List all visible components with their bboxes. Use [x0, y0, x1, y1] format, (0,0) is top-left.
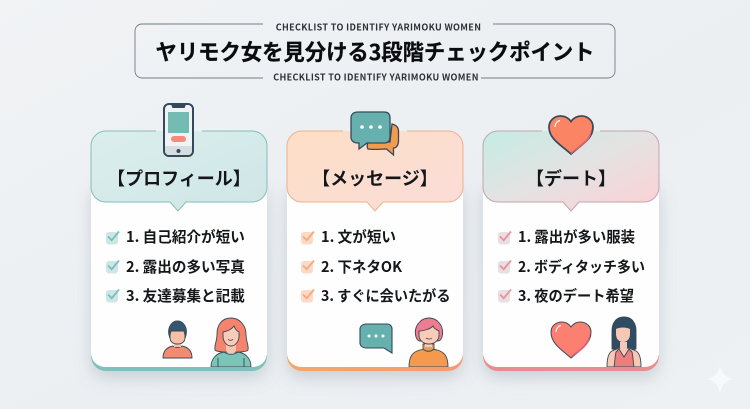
- title subtitle bottom: CHECKLIST TO IDENTIFY YARIMOKU WOMEN: [273, 70, 479, 84]
- checklist: [301, 226, 450, 306]
- item 3: 3. 夜のデート希望: [518, 285, 634, 306]
- item 1: 1. 文が短い: [321, 226, 396, 247]
- card body: [287, 180, 463, 371]
- panel: date: [483, 116, 659, 371]
- icon: chat bubbles: [351, 112, 398, 155]
- icon: woman with dark hair: [607, 317, 641, 367]
- icon: smartphone: [164, 104, 193, 156]
- card body: [91, 180, 267, 371]
- heading: 【デート】: [526, 165, 616, 191]
- checklist: [498, 226, 645, 306]
- checklist: [106, 226, 245, 306]
- header bubble: [483, 131, 659, 211]
- icon: sparkle: [707, 365, 733, 393]
- header bubble: [287, 131, 463, 211]
- panel: message: [287, 112, 463, 371]
- heading: 【プロフィール】: [107, 165, 251, 191]
- item 1: 1. 露出が多い服装: [518, 226, 635, 247]
- icon: man: [163, 321, 192, 358]
- icon: woman: [211, 318, 251, 367]
- item 2: 2. ボディタッチ多い: [518, 256, 645, 277]
- title subtitle top: CHECKLIST TO IDENTIFY YARIMOKU WOMEN: [276, 20, 481, 34]
- main title: ヤリモク女を見分ける3段階チェックポイント: [156, 36, 594, 67]
- item 3: 3. 友達募集と記載: [126, 285, 245, 306]
- title banner: [135, 20, 615, 84]
- item 2: 2. 下ネタOK: [321, 256, 403, 277]
- heading: 【メッセージ】: [312, 165, 438, 191]
- item 3: 3. すぐに会いたがる: [321, 285, 450, 306]
- item 2: 2. 露出の多い写真: [126, 256, 245, 277]
- icon: heart: [549, 116, 593, 154]
- icon: woman with short pink hair: [409, 318, 448, 367]
- item 1: 1. 自己紹介が短い: [126, 226, 245, 247]
- icon: small chat bubble: [360, 324, 392, 353]
- icon: small heart: [551, 322, 591, 358]
- card body: [483, 180, 659, 371]
- header bubble: [91, 131, 267, 211]
- panel: profile: [91, 104, 267, 371]
